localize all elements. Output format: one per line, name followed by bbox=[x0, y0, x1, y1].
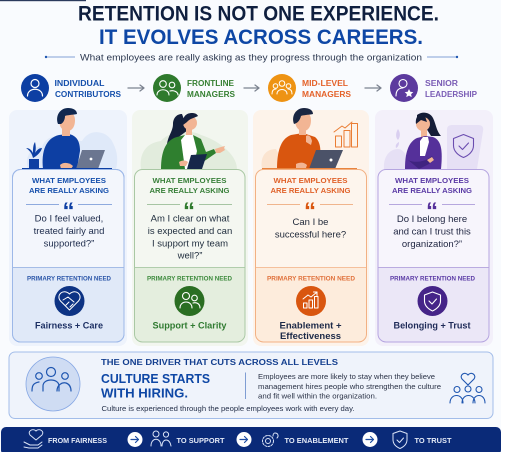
title bbox=[78, 2, 439, 49]
stage: frontline managers bbox=[153, 74, 235, 102]
stage: individual contributors bbox=[21, 74, 121, 102]
career stage row bbox=[21, 74, 477, 102]
body text: Employees are more likely to stay when they believe bbox=[258, 372, 435, 381]
heading: ARE REALLY ASKING bbox=[150, 186, 230, 195]
stage: senior leadership bbox=[390, 74, 477, 102]
question: I support my team bbox=[152, 238, 228, 250]
heading: WHAT EMPLOYEES bbox=[152, 176, 226, 185]
heading: THE ONE DRIVER THAT CUTS ACROSS ALL LEVELS bbox=[101, 357, 338, 367]
illustration: man with growth chart bbox=[262, 108, 358, 170]
quote divider: “ bbox=[426, 198, 438, 225]
icon: shield bbox=[418, 286, 448, 316]
panel: individual contributors bbox=[9, 108, 127, 346]
icon: gears bbox=[262, 433, 278, 446]
stage: senior leadership: SENIOR bbox=[425, 79, 458, 88]
arrow bbox=[244, 85, 259, 91]
arrow bbox=[362, 432, 378, 447]
question: successful here? bbox=[275, 230, 346, 240]
heading: ARE REALLY ASKING bbox=[392, 186, 472, 195]
heading bbox=[150, 176, 230, 195]
caption: Culture is experienced through the people employees work with every day. bbox=[102, 404, 354, 413]
quote divider bbox=[267, 198, 353, 225]
question: is expected and can bbox=[148, 226, 232, 237]
question bbox=[393, 214, 471, 250]
arrow bbox=[365, 85, 381, 91]
need label bbox=[280, 320, 342, 341]
question: Am I clear on what bbox=[151, 214, 230, 224]
headline: WITH HIRING. bbox=[101, 386, 188, 400]
stage: individual contributors: INDIVIDUAL bbox=[54, 79, 105, 88]
question bbox=[275, 217, 346, 240]
heading: ARE REALLY ASKING bbox=[270, 186, 351, 195]
illustration: woman with arms crossed and shield bbox=[384, 113, 483, 169]
icon: team bbox=[174, 286, 204, 316]
stage: frontline managers: FRONTLINE bbox=[187, 79, 234, 88]
body text: and fit well within the organization. bbox=[258, 392, 377, 400]
quote divider: “ bbox=[62, 198, 74, 225]
icon: shield check bbox=[393, 431, 407, 448]
heading: WHAT EMPLOYEES bbox=[395, 176, 469, 185]
question: treated fairly and bbox=[34, 226, 104, 237]
heading bbox=[270, 176, 351, 195]
question bbox=[148, 214, 232, 262]
label: TO SUPPORT bbox=[176, 436, 225, 445]
arrow bbox=[128, 85, 144, 91]
quote divider bbox=[389, 198, 475, 225]
stage: senior leadership: LEADERSHIP bbox=[425, 90, 477, 99]
heading bbox=[29, 176, 109, 195]
question bbox=[34, 214, 104, 250]
headline: CULTURE STARTS bbox=[101, 371, 210, 386]
callout: culture starts with hiring bbox=[9, 352, 493, 418]
question: well?” bbox=[177, 250, 202, 262]
heading: WHAT EMPLOYEES bbox=[274, 176, 348, 185]
need label: Belonging + Trust bbox=[394, 320, 470, 330]
icon: people bbox=[151, 431, 171, 446]
headline bbox=[101, 371, 210, 400]
question: Do I feel valued, bbox=[35, 214, 103, 224]
stage: mid-level managers: MID-LEVEL bbox=[302, 79, 348, 88]
need label: Effectiveness bbox=[280, 330, 341, 341]
question: Do I belong here bbox=[397, 214, 467, 225]
label: FROM FAIRNESS bbox=[48, 436, 107, 445]
quote divider: “ bbox=[183, 198, 195, 225]
arrow bbox=[128, 432, 142, 447]
label: TO ENABLEMENT bbox=[284, 436, 349, 445]
question: and can I trust this bbox=[393, 226, 471, 238]
subtitle: What employees are really asking as they progress through the organization bbox=[80, 52, 422, 64]
need label: Support + Clarity bbox=[152, 320, 227, 330]
panel: frontline managers bbox=[132, 110, 248, 346]
heading: WHAT EMPLOYEES bbox=[32, 176, 106, 185]
primary retention need: PRIMARY RETENTION NEED bbox=[267, 276, 355, 282]
stage: mid-level managers: MANAGERS bbox=[302, 90, 351, 99]
quote divider bbox=[26, 198, 112, 225]
stage: individual contributors: CONTRIBUTORS bbox=[55, 90, 121, 99]
question: Can I be bbox=[293, 217, 328, 228]
primary retention need: PRIMARY RETENTION NEED bbox=[147, 276, 232, 282]
quote divider: “ bbox=[304, 198, 316, 225]
quote divider bbox=[147, 198, 232, 225]
illustration: man at laptop bbox=[22, 108, 117, 170]
heading: ARE REALLY ASKING bbox=[29, 186, 109, 195]
icon: growth chart bbox=[296, 286, 326, 316]
primary retention need: PRIMARY RETENTION NEED bbox=[27, 276, 111, 282]
question: organization?” bbox=[402, 239, 462, 250]
need label: Fairness + Care bbox=[35, 320, 103, 330]
heading bbox=[392, 176, 472, 195]
icon: people circle bbox=[26, 357, 80, 411]
label: TO TRUST bbox=[414, 436, 452, 445]
icon: handshake heart bbox=[54, 286, 84, 316]
stage: frontline managers: MANAGERS bbox=[187, 90, 235, 99]
body text: management hires people who strengthen the culture bbox=[258, 382, 441, 391]
title: IT EVOLVES ACROSS CAREERS. bbox=[99, 26, 423, 49]
body text bbox=[258, 372, 441, 400]
primary retention need: PRIMARY RETENTION NEED bbox=[390, 276, 475, 282]
illustration: woman with tablet bbox=[141, 113, 237, 169]
icon: team with heart bbox=[450, 373, 485, 403]
question: supported?” bbox=[44, 238, 94, 250]
title: RETENTION IS NOT ONE EXPERIENCE. bbox=[78, 2, 439, 26]
footer banner bbox=[1, 427, 501, 452]
stage: mid-level managers bbox=[268, 74, 351, 102]
panel: senior leadership bbox=[375, 110, 493, 346]
need label: Enablement + bbox=[280, 320, 342, 330]
panel: mid-level managers bbox=[253, 108, 369, 346]
arrow bbox=[236, 432, 252, 447]
icon: hand heart bbox=[24, 430, 43, 448]
